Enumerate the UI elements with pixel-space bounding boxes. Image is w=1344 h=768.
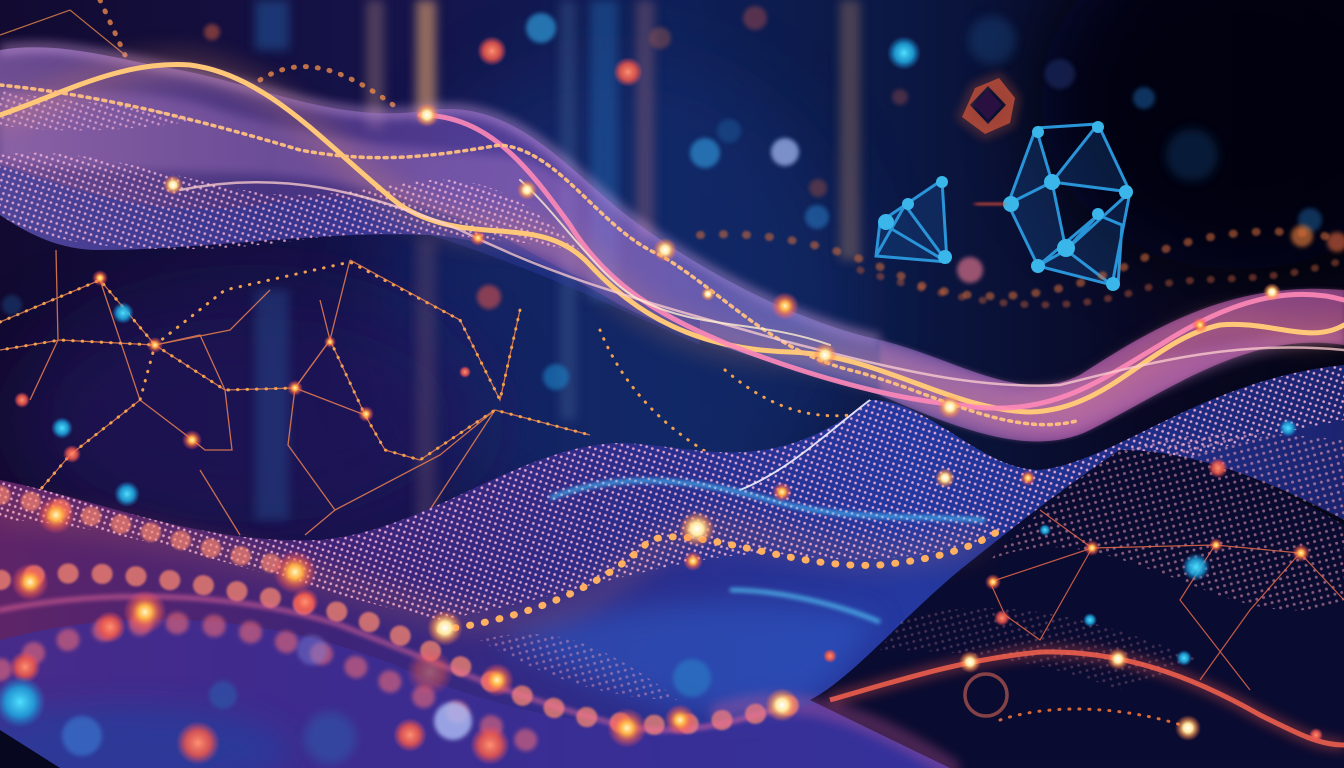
vertical light bars <box>255 0 860 540</box>
icon: orange hexagon ring <box>962 78 1015 134</box>
lower right: dark corner with mesh and network <box>810 419 1344 768</box>
upper ribbon: translucent wave <box>0 47 1344 441</box>
network: upper left strands <box>0 0 400 110</box>
bottom bokeh lights <box>0 468 1036 765</box>
lower ribbon: blue sheet <box>0 365 1344 768</box>
lower ribbon: dot mesh <box>0 365 1344 700</box>
upper ribbon: dot mesh <box>0 90 580 250</box>
icon: blue mesh polyhedra <box>876 121 1133 291</box>
bokeh lights: top area <box>204 6 1344 283</box>
network: left lower web <box>0 250 850 535</box>
right orange dotted strand <box>700 203 1344 305</box>
upper ribbon: glowing strands <box>0 65 1344 425</box>
bottom-left orange beaded waves <box>0 495 1000 768</box>
